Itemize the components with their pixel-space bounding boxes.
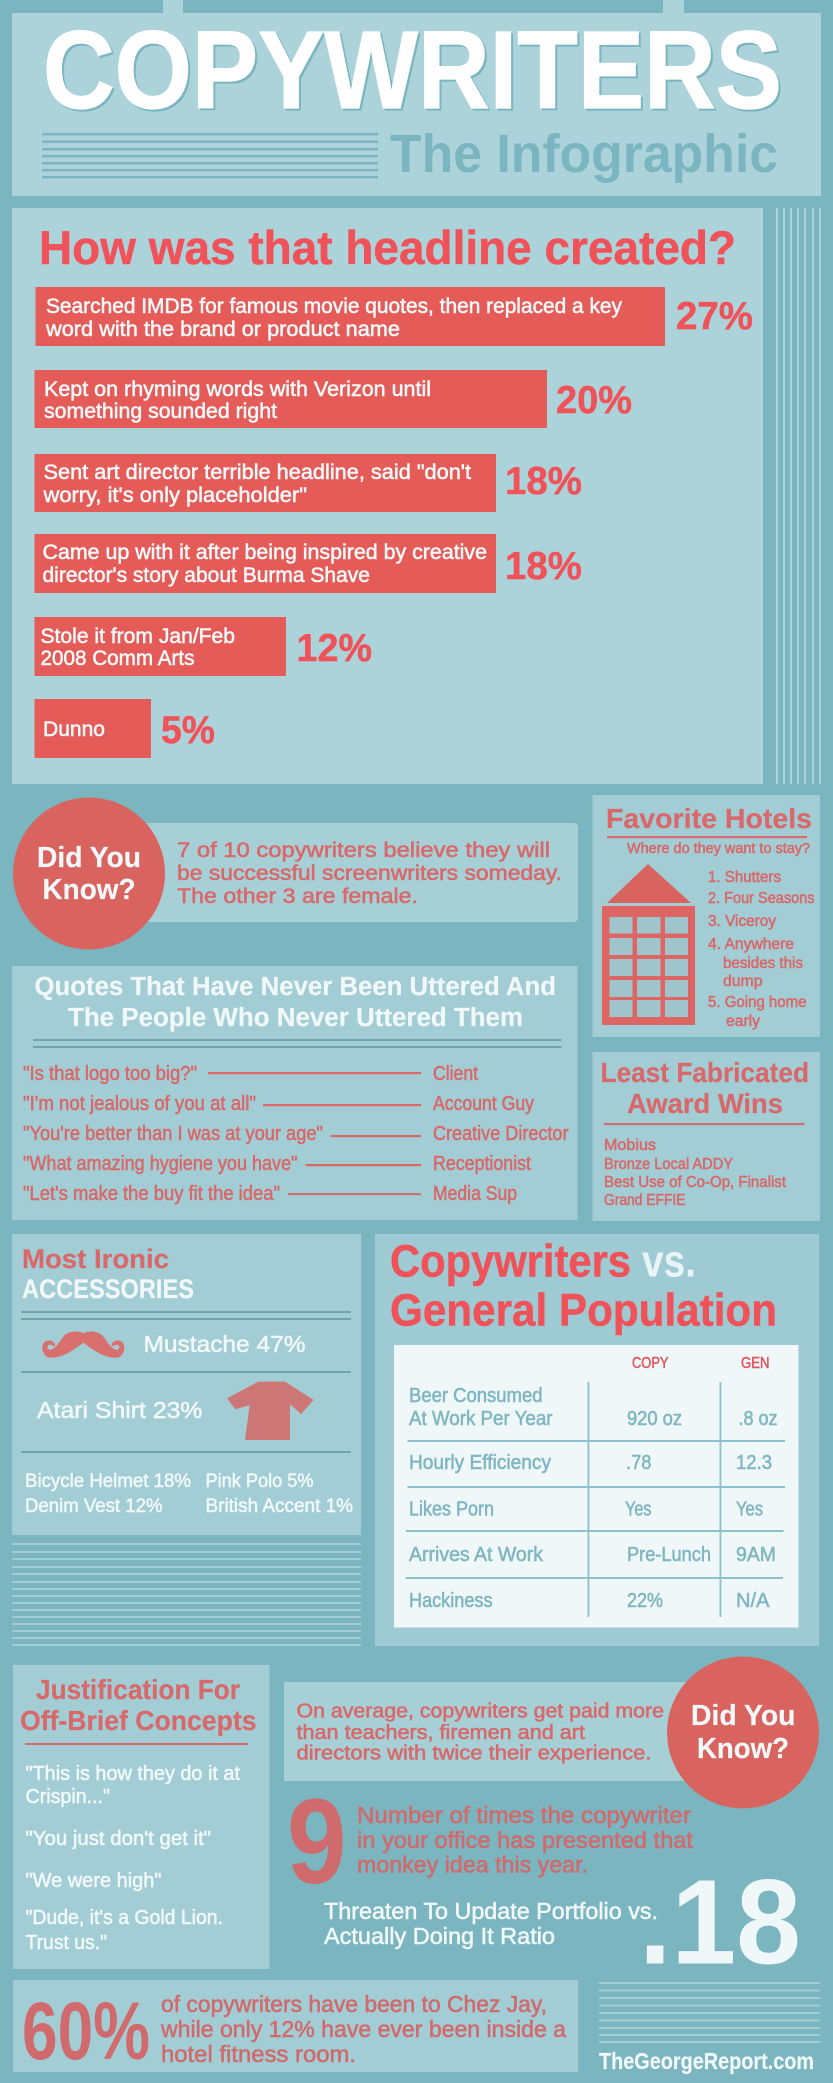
- panel: title header: [12, 0, 821, 196]
- label: mustache 47 percent: Mustache 47%: [144, 1331, 306, 1357]
- quote row: client: Client: [433, 1063, 478, 1085]
- row: hackiness: [409, 1590, 770, 1612]
- callout: did you know screenwriters: The other 3 are female.: [177, 885, 418, 908]
- table: comparison: [394, 1345, 798, 1628]
- list: awards: Mobius: [604, 1137, 656, 1154]
- list: hotels: early: [726, 1013, 760, 1030]
- quote row: creative director: [23, 1123, 569, 1145]
- list: other accessories: [25, 1470, 353, 1517]
- heading: copywriters vs general population: Copywriters: [390, 1236, 631, 1286]
- quote row: receptionist: "What amazing hygiene you have": [23, 1153, 298, 1175]
- list: justifications: "You just don't get it": [26, 1828, 211, 1850]
- list: justifications: "We were high": [26, 1870, 162, 1892]
- bar: 18 percent placeholder: Sent art director terrible headline, said "don't: [44, 461, 471, 484]
- list: other accessories: Denim Vest 12%: [25, 1495, 162, 1517]
- panel: 60 percent chez jay: of copywriters have been to Chez Jay,: [161, 1991, 547, 2017]
- bar: 18 percent burma shave: 18%: [505, 545, 582, 588]
- quote row: account guy: "I'm not jealous of you at all": [23, 1093, 256, 1115]
- heading: justification: Off-Brief Concepts: [20, 1705, 256, 1736]
- row: beer consumed: At Work Per Year: [409, 1408, 553, 1430]
- callout: did you know screenwriters: be successful screenwriters someday.: [177, 862, 562, 885]
- list: hotels: 4. Anywhere: [708, 936, 794, 953]
- row: hourly efficiency: .78: [626, 1452, 652, 1474]
- bar: 27 percent: Searched IMDB for famous movie quotes, then replaced a key: [46, 295, 622, 318]
- row: beer consumed: 920 oz: [627, 1408, 682, 1430]
- bar: 12 percent: 2008 Comm Arts: [40, 647, 194, 670]
- heading: favorite hotels: Favorite Hotels: [606, 803, 812, 834]
- bar: 20 percent: Kept on rhyming words with Verizon until: [44, 378, 431, 401]
- callout: did you know pay: On average, copywriters get paid more: [296, 1700, 664, 1722]
- heading: quotes: [34, 973, 556, 1032]
- list: justifications: Trust us.": [26, 1932, 107, 1954]
- heading: most ironic accessories: ACCESSORIES: [22, 1274, 194, 1304]
- row: beer consumed: Beer Consumed: [409, 1385, 542, 1407]
- quote row: media sup: "Let's make the buy fit the idea": [23, 1183, 280, 1205]
- callout: did you know screenwriters: [13, 798, 578, 950]
- row: likes porn: Likes Porn: [409, 1498, 494, 1520]
- list: justifications: Crispin...": [26, 1786, 110, 1808]
- heading: most ironic accessories: [22, 1244, 194, 1304]
- quote row: client: "Is that logo too big?": [23, 1063, 197, 1085]
- heading: most ironic accessories: Most Ironic: [22, 1244, 169, 1274]
- stat: 9 monkey idea: 9: [287, 1773, 346, 1909]
- callout: did you know pay: Know?: [697, 1733, 789, 1765]
- panel: 60 percent chez jay: 60%: [22, 1986, 150, 2077]
- list: hotels: [708, 869, 814, 1030]
- panel: most ironic accessories: [12, 1234, 361, 1535]
- heading: copywriters vs general population: vs.: [642, 1236, 696, 1286]
- bar: 18 percent placeholder: [34, 454, 582, 512]
- row: arrives at work: [409, 1544, 776, 1566]
- bar: 27 percent: word with the brand or product name: [45, 318, 400, 341]
- list: justifications: "Dude, it's a Gold Lion.: [26, 1907, 223, 1929]
- row: arrives at work: 9AM: [736, 1544, 776, 1566]
- quote row: media sup: Media Sup: [433, 1183, 517, 1205]
- callout: did you know screenwriters: 7 of 10 copywriters believe they will: [177, 839, 550, 862]
- panel: justification for off-brief concepts: [13, 1665, 270, 1969]
- heading: least fabricated: Award Wins: [627, 1088, 783, 1119]
- row: hackiness: N/A: [736, 1590, 770, 1612]
- row: likes porn: [409, 1498, 763, 1520]
- list: hotels: 2. Four Seasons: [708, 890, 814, 907]
- heading: least fabricated: Least Fabricated: [600, 1057, 809, 1088]
- list: hotels: besides this: [723, 955, 803, 972]
- panel: least fabricated award wins: [592, 1052, 820, 1221]
- callout: did you know pay: than teachers, firemen and art: [296, 1722, 585, 1744]
- row: beer consumed: [409, 1385, 778, 1430]
- callout: did you know screenwriters: Know?: [42, 874, 136, 906]
- subtitle: The Infographic: The Infographic: [390, 124, 778, 184]
- row: likes porn: Yes: [625, 1498, 652, 1520]
- stat: 9 monkey idea: in your office has presented that: [357, 1827, 694, 1853]
- quote row: media sup: [23, 1183, 517, 1205]
- row: hourly efficiency: 12.3: [736, 1452, 772, 1474]
- row: hackiness: Hackiness: [409, 1590, 492, 1612]
- list: awards: Best Use of Co-Op, Finalist: [604, 1174, 787, 1191]
- bar: 12 percent: [34, 617, 372, 676]
- stat: .18 portfolio ratio: .18: [639, 1854, 801, 1990]
- bar: 20 percent: 20%: [556, 379, 632, 422]
- bar: 18 percent burma shave: [34, 534, 582, 593]
- heading: quotes: Quotes That Have Never Been Uttered And: [34, 973, 556, 1001]
- stat: 9 monkey idea: monkey idea this year.: [357, 1852, 588, 1878]
- panel: favorite hotels: Where do they want to stay?: [627, 840, 810, 857]
- stat: .18 portfolio ratio: [324, 1854, 801, 1990]
- bar: 20 percent: [34, 370, 632, 428]
- callout: did you know pay: directors with twice their experience.: [296, 1742, 652, 1764]
- panel: 60 percent chez jay: hotel fitness room.: [161, 2041, 356, 2067]
- callout: did you know screenwriters: Did You: [37, 842, 141, 874]
- quote row: account guy: Account Guy: [433, 1093, 534, 1115]
- table header: COPY: [632, 1355, 668, 1372]
- quote row: receptionist: Receptionist: [433, 1153, 531, 1175]
- quote row: creative director: "You're better than I was at your age": [23, 1123, 323, 1145]
- list: awards: Grand EFFIE: [604, 1192, 686, 1209]
- panel: how was that headline created: [12, 208, 763, 784]
- bar: 5 percent: Dunno: [43, 718, 105, 741]
- callout: did you know pay: Did You: [691, 1700, 796, 1732]
- icon: mustache: [42, 1332, 124, 1358]
- list: hotels: 1. Shutters: [708, 869, 781, 886]
- row: beer consumed: .8 oz: [738, 1408, 778, 1430]
- table header: GEN: [741, 1355, 770, 1372]
- row: likes porn: Yes: [736, 1498, 763, 1520]
- list: justifications: [26, 1763, 240, 1954]
- label: atari shirt 23 percent: Atari Shirt 23%: [37, 1397, 202, 1423]
- bar: 18 percent placeholder: 18%: [505, 460, 582, 503]
- panel: copywriters vs general population: [375, 1234, 819, 1646]
- row: hourly efficiency: Hourly Efficiency: [409, 1452, 551, 1474]
- list: justifications: "This is how they do it at: [26, 1763, 240, 1785]
- row: hackiness: 22%: [627, 1590, 663, 1612]
- bar: 12 percent: Stole it from Jan/Feb: [40, 625, 235, 648]
- callout: did you know pay: [284, 1656, 819, 1808]
- stat: 9 monkey idea: Number of times the copywriter: [357, 1802, 691, 1828]
- icon: hotel building: [602, 864, 695, 1025]
- heading: justification: Justification For: [36, 1674, 240, 1705]
- heading: copywriters vs general population: General Population: [390, 1284, 777, 1336]
- heading: least fabricated: [600, 1057, 809, 1119]
- row: hourly efficiency: [409, 1452, 772, 1474]
- list: hotels: 5. Going home: [708, 994, 807, 1011]
- bar: 27 percent: [36, 287, 753, 346]
- bar: 20 percent: something sounded right: [44, 400, 277, 423]
- bar: 18 percent burma shave: director's story about Burma Shave: [42, 564, 370, 587]
- list: other accessories: Bicycle Helmet 18%: [25, 1470, 191, 1492]
- heading: quotes: The People Who Never Uttered Them: [68, 1004, 523, 1032]
- bar: 12 percent: 12%: [296, 627, 372, 670]
- bar: 5 percent: 5%: [161, 709, 215, 752]
- list: hotels: dump: [723, 973, 763, 990]
- panel: favorite hotels: [592, 795, 820, 1037]
- row: arrives at work: Arrives At Work: [409, 1544, 544, 1566]
- bar: 18 percent placeholder: worry, it's only placeholder": [42, 484, 307, 507]
- quote row: account guy: [23, 1093, 534, 1115]
- row: arrives at work: Pre-Lunch: [627, 1544, 711, 1566]
- stat: 9 monkey idea: [287, 1773, 694, 1909]
- stat: .18 portfolio ratio: Actually Doing It Ratio: [324, 1923, 555, 1949]
- list: awards: Bronze Local ADDY: [604, 1156, 733, 1173]
- heading: justification: [20, 1674, 256, 1736]
- icon: shirt: [227, 1382, 314, 1440]
- panel: 60 percent chez jay: [13, 1980, 578, 2077]
- panel: quotes never uttered: [12, 966, 578, 1220]
- bar: 5 percent: [34, 699, 215, 758]
- bar: 18 percent burma shave: Came up with it after being inspired by creative: [42, 541, 487, 564]
- panel: 60 percent chez jay: while only 12% have ever been inside a: [160, 2016, 566, 2042]
- quote row: receptionist: [23, 1153, 531, 1175]
- heading: how was that headline created: How was that headline created?: [39, 221, 736, 274]
- list: other accessories: British Accent 1%: [206, 1495, 353, 1517]
- list: other accessories: Pink Polo 5%: [206, 1470, 314, 1492]
- list: awards: [604, 1137, 787, 1209]
- list: hotels: 3. Viceroy: [708, 913, 776, 930]
- heading: copywriters vs general population: [390, 1236, 777, 1336]
- stat: .18 portfolio ratio: Threaten To Update Portfolio vs.: [324, 1898, 658, 1924]
- quote row: client: [23, 1063, 478, 1085]
- bar: 27 percent: 27%: [676, 295, 753, 338]
- table header: [632, 1355, 770, 1372]
- quote row: creative director: Creative Director: [433, 1123, 569, 1145]
